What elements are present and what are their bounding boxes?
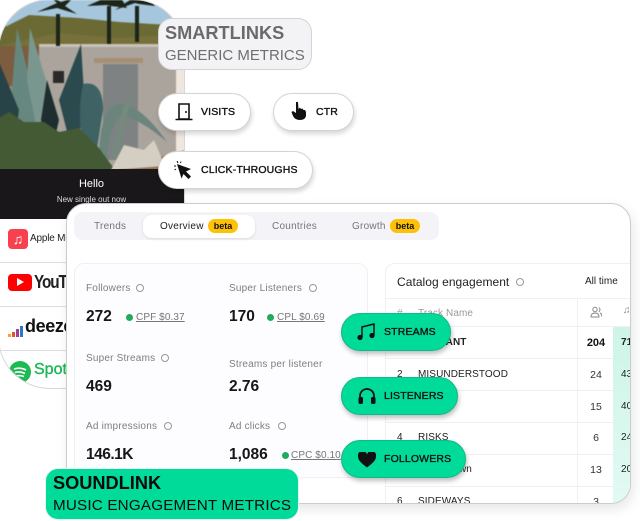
platform row: Deezer: deezer	[25, 316, 80, 336]
icon: YouTube	[8, 274, 32, 291]
palms	[37, 0, 155, 46]
panel: catalog engagement table	[385, 263, 640, 513]
metric: ad clicks: Ad clicks	[229, 421, 270, 432]
metric: followers	[86, 283, 185, 325]
agave leaves	[0, 28, 167, 160]
metric: ad impressions: Ad impressions	[86, 421, 157, 432]
platform row: Deezer	[0, 307, 186, 351]
metric: followers: Followers	[86, 283, 131, 294]
heading: Smartlinks generic metrics	[158, 18, 312, 70]
table rows: 6	[593, 432, 599, 444]
caption: subtitle: New single out now	[57, 195, 126, 204]
heading: Smartlinks generic metrics: SMARTLINKS	[165, 23, 284, 43]
platform row: YouTube	[0, 263, 186, 307]
heading: Soundlink music engagement metrics	[45, 468, 299, 520]
badge: beta: beta	[214, 221, 232, 231]
panel: overview metrics	[74, 263, 368, 478]
streams column highlight	[613, 327, 640, 514]
table header: ♫	[623, 305, 631, 316]
black caption band	[0, 169, 186, 219]
pill: click-throughs	[158, 151, 313, 189]
pill: followers: FOLLOWERS	[384, 453, 451, 465]
icon: headphones	[358, 388, 376, 404]
table rows: MISUNDERSTOOD	[418, 369, 508, 380]
metric: ad clicks	[229, 421, 341, 463]
pill: followers	[341, 440, 466, 478]
pill: streams: STREAMS	[384, 326, 436, 338]
table rows: 24	[590, 369, 602, 381]
table rows: 2	[397, 369, 403, 380]
pill: visits	[158, 93, 251, 131]
icon: hand pointer	[292, 102, 306, 120]
table rows: 13	[590, 464, 602, 476]
metric: streams per listener: 2.76	[229, 378, 259, 395]
platform row: Spotify	[10, 361, 83, 382]
platform row: Apple Music: Apple Music	[30, 233, 82, 244]
table rows	[397, 337, 631, 504]
icon: Deezer	[8, 326, 23, 337]
platform row: Apple Music	[0, 219, 186, 263]
metric: super listeners: 170	[229, 308, 255, 325]
badge: beta	[208, 219, 238, 233]
metric: super listeners: Super Listeners	[229, 283, 302, 294]
platform row: YouTube: YouTube	[34, 272, 89, 292]
table rows: 15	[590, 401, 602, 413]
metric: super listeners	[229, 283, 325, 325]
heading: Smartlinks generic metrics: GENERIC METRICS	[165, 47, 305, 64]
pill: visits: VISITS	[201, 106, 235, 118]
period selector: All time	[585, 276, 618, 287]
tab: Overview active: Overview	[160, 221, 204, 232]
icon: door	[176, 103, 192, 120]
metric: streams per listener: Streams per listener	[229, 359, 322, 370]
metric: super streams: Super Streams	[86, 353, 155, 364]
badge: beta	[390, 219, 420, 233]
metric: ad clicks: 1,086	[229, 446, 268, 463]
metric: ad impressions: 146.1K	[86, 446, 133, 463]
heading: Soundlink music engagement metrics: SOUNDLINK	[53, 473, 161, 493]
metric: ad clicks: CPC $0.10	[291, 450, 341, 461]
pill: CTR: CTR	[316, 106, 338, 118]
table rows: ELEGANT	[418, 337, 466, 348]
platform row: Spotify: Spotify	[34, 361, 83, 378]
metric: super listeners: CPL $0.69	[277, 312, 325, 323]
metric: ad impressions	[86, 421, 172, 463]
table rows: 4	[397, 432, 403, 443]
heading: Soundlink music engagement metrics: MUSIC ENGAGEMENT METRICS	[53, 497, 291, 514]
icon: Apple Music: ♫	[13, 231, 23, 247]
tab: Trends: Trends	[94, 221, 126, 232]
table title: Catalog engagement	[397, 275, 509, 289]
tab: Overview active	[143, 215, 255, 238]
pill: CTR	[273, 93, 354, 131]
table rows: RISKS	[418, 432, 449, 443]
metric: super streams: 469	[86, 378, 112, 395]
table rows: 204	[587, 337, 605, 349]
table rows: Down	[446, 464, 472, 475]
pill: listeners	[341, 377, 458, 415]
pill: listeners: LISTENERS	[384, 390, 444, 402]
dashboard panel	[66, 203, 631, 504]
metric: followers: CPF $0.37	[136, 312, 185, 323]
metric: streams per listener	[229, 359, 322, 395]
table header: #	[397, 308, 403, 319]
pill: click-throughs: CLICK-THROUGHS	[201, 164, 298, 176]
table header: Track Name	[418, 308, 473, 319]
table rows: 1	[397, 337, 403, 348]
tab bar	[74, 212, 439, 240]
photo: house with agave	[0, 0, 184, 169]
badge: beta: beta	[396, 221, 414, 231]
icon: cursor click	[174, 161, 191, 179]
icon: music note	[357, 323, 375, 340]
icon: people	[590, 306, 602, 318]
table header	[397, 305, 631, 319]
tab: Countries: Countries	[272, 221, 317, 232]
icon: Apple Music	[8, 229, 28, 249]
icon: Spotify	[10, 361, 31, 382]
tab: Growth: Growth	[352, 221, 386, 232]
metric: super streams	[86, 353, 169, 395]
metric: followers: 272	[86, 308, 112, 325]
pill: streams	[341, 313, 451, 351]
phone: smartlink page	[0, 0, 185, 389]
caption: Hello: Hello	[79, 178, 104, 190]
icon: heart	[358, 452, 376, 468]
